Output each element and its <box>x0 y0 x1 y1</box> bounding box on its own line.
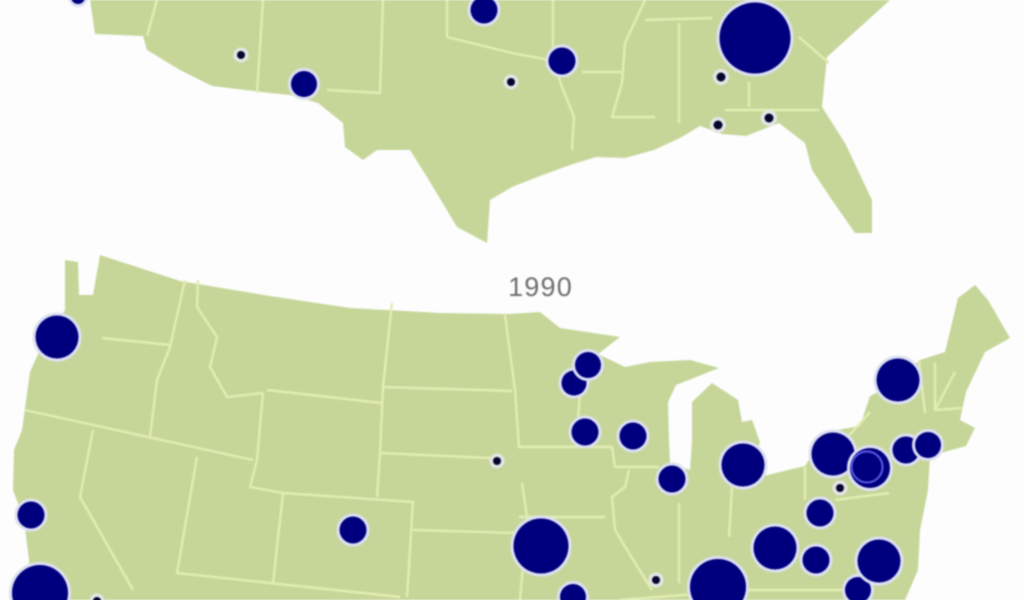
state borders: northern states <box>25 280 962 600</box>
circles: southern cities <box>71 0 790 130</box>
year label: 1990 <box>508 272 573 302</box>
circles: northern cities <box>12 316 941 600</box>
land: southern states <box>90 0 890 243</box>
map: upper panel southern US <box>71 0 890 243</box>
state borders: southern states <box>147 0 829 150</box>
land: northern states <box>13 255 1010 600</box>
map: lower panel 1990 <box>12 255 1010 600</box>
